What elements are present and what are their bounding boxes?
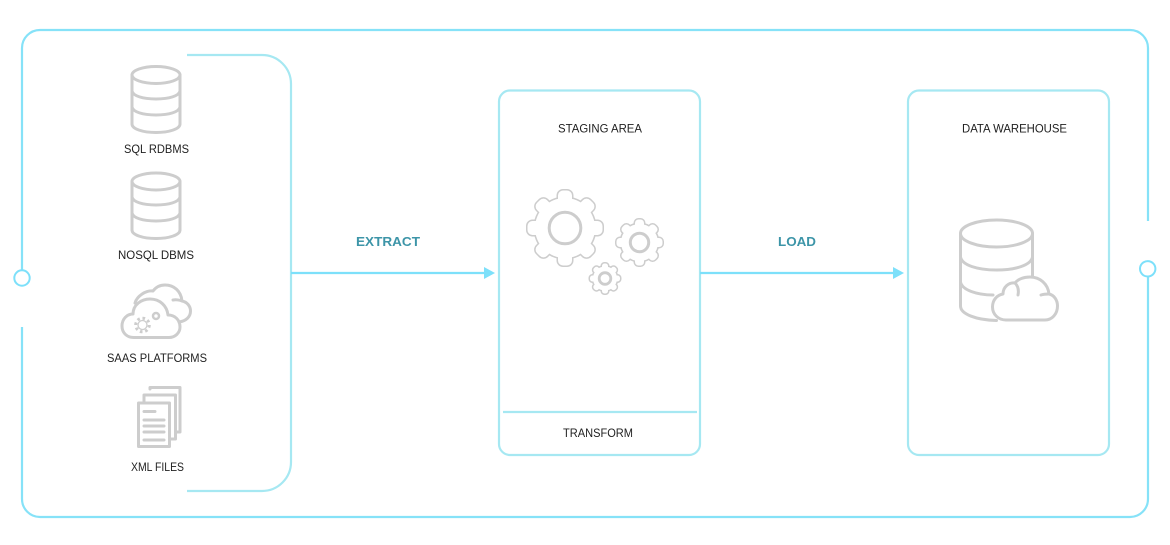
- panel: data warehouse: [908, 90, 1109, 455]
- label: EXTRACT: EXTRACT: [356, 234, 420, 249]
- label: NOSQL DBMS: NOSQL DBMS: [118, 250, 194, 262]
- icon: SQL database: [132, 66, 180, 132]
- label: SQL RDBMS: SQL RDBMS: [124, 144, 189, 156]
- icon: XML documents: [138, 388, 180, 446]
- heading: data warehouse: DATA WAREHOUSE: [962, 124, 1067, 136]
- left connector node: [14, 270, 30, 286]
- icon: medium gear: [616, 220, 662, 266]
- label: LOAD: LOAD: [778, 234, 816, 249]
- arrow: extract: [291, 267, 495, 279]
- divider: [503, 411, 697, 413]
- icon: warehouse database with cloud: [960, 220, 1058, 320]
- panel: staging area: [499, 90, 700, 455]
- panel: sources: [187, 55, 291, 491]
- heading: staging area: STAGING AREA: [558, 124, 642, 136]
- label: XML FILES: XML FILES: [131, 462, 184, 474]
- icon: NoSQL database: [132, 173, 180, 238]
- icon: SaaS clouds: [122, 285, 190, 338]
- arrow: load: [700, 267, 904, 279]
- icon: large gear: [528, 190, 602, 266]
- icon: small gear: [590, 264, 620, 294]
- label: transform: TRANSFORM: [563, 428, 633, 440]
- label: SAAS PLATFORMS: SAAS PLATFORMS: [107, 353, 207, 365]
- right connector node: [1140, 261, 1155, 276]
